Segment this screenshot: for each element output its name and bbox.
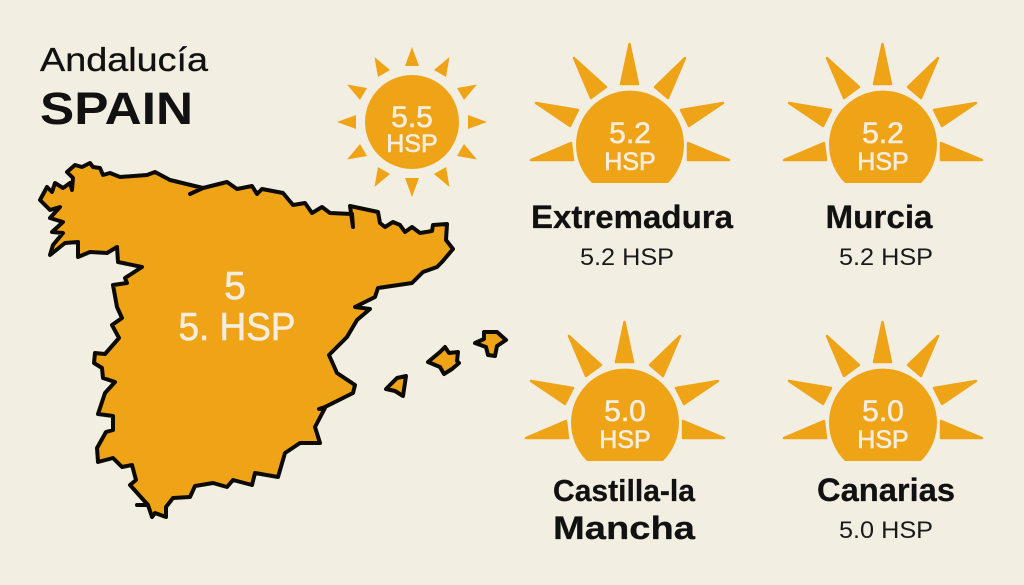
region name: Canarias: [817, 472, 955, 508]
card: Canarias: [784, 322, 982, 544]
island: Mallorca: [428, 347, 459, 374]
title: [40, 41, 209, 134]
island: Menorca: [475, 332, 506, 356]
region name: Extremadura: [531, 199, 733, 235]
card: Castilla-la Mancha: [526, 322, 724, 546]
sun icon: 5.0: [604, 395, 646, 428]
map label: 5: [224, 265, 246, 308]
card: Extremadura: [531, 44, 733, 271]
sun icon: [784, 44, 982, 183]
sun icon: 5.2: [609, 117, 651, 150]
island: Ibiza: [386, 376, 406, 396]
mainland outline: [40, 163, 453, 517]
sun icon: [784, 322, 982, 461]
title: Andalucía: [40, 41, 209, 78]
value: [386, 101, 438, 158]
sun: Andalucía 5.5 HSP: [337, 47, 487, 197]
sun icon: HSP: [599, 426, 651, 454]
value: HSP: [386, 130, 438, 158]
sun icon: HSP: [604, 148, 656, 176]
map of Spain: [40, 163, 506, 517]
disc: [365, 75, 459, 169]
value: 5.5: [391, 101, 433, 134]
sun icon: 5.0: [862, 395, 904, 428]
sun icon: 5.2: [862, 117, 904, 150]
region value: 5.0 HSP: [839, 517, 933, 544]
region name: Castilla-la: [553, 473, 696, 508]
card: Murcia: [784, 44, 982, 271]
map label: [178, 265, 296, 349]
sun icon: [526, 322, 724, 461]
sun icon: HSP: [857, 148, 909, 176]
region name: Mancha: [553, 510, 695, 546]
region name: Murcia: [826, 199, 933, 235]
region value: 5.2 HSP: [580, 244, 674, 271]
map label: 5. HSP: [178, 306, 296, 349]
rays: [337, 47, 487, 197]
region value: 5.2 HSP: [839, 244, 933, 271]
region name: [553, 473, 696, 546]
title: SPAIN: [40, 83, 193, 134]
sun icon: HSP: [857, 426, 909, 454]
sun icon: [531, 44, 729, 183]
